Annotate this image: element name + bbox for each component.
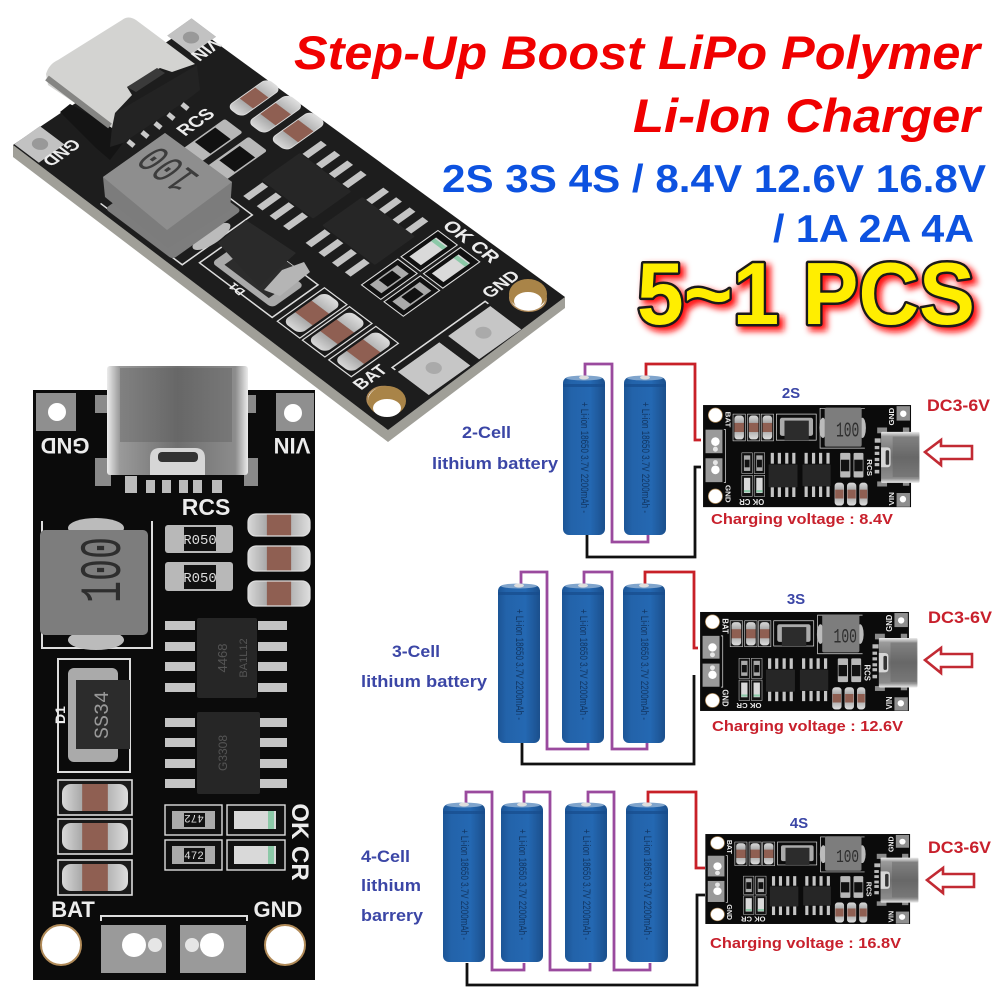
product photo: top view board: GND: [41, 433, 89, 458]
batteries 4S: + Li-ion 18650 3.7V 2200mAh -: [641, 829, 653, 940]
input voltage 2S: DC3-6V: [927, 397, 990, 415]
4-cell label: [361, 847, 424, 925]
batteries 4S: + Li-ion 18650 3.7V 2200mAh -: [516, 829, 528, 940]
title: [294, 26, 983, 142]
product photo: top view board: SS34: [92, 691, 115, 739]
product photo: angled charger board: VIN: [186, 35, 226, 64]
panel: 3-cell wiring: [361, 572, 992, 764]
batteries 4S: [443, 802, 668, 962]
charger board 4S: VIN: [886, 911, 895, 922]
wires 3S: [521, 572, 698, 764]
charger board 4S: OK CR: [740, 915, 766, 923]
charger board 2S: 100: [836, 420, 859, 444]
charger board 3S: GND: [720, 689, 729, 707]
charger board 2S: RCS: [865, 459, 874, 476]
batteries 2S: + Li-ion 18650 3.7V 2200mAh -: [639, 402, 651, 513]
quantity badge: 5~1 PCS: [637, 244, 975, 343]
charger board 2S: [703, 405, 919, 507]
charger board 3S: 100: [834, 627, 857, 649]
input voltage 3S: DC3-6V: [928, 609, 992, 627]
diode: [218, 220, 310, 296]
heading 4S: 4S: [790, 815, 808, 832]
arrow 2S: [925, 440, 972, 465]
wires 2S: [585, 364, 701, 557]
charger board 4S: GND: [886, 836, 895, 852]
inductor: [103, 133, 232, 248]
batteries 3S: + Li-ion 18650 3.7V 2200mAh -: [638, 609, 650, 720]
specification text: 2S 3S 4S / 8.4V 12.6V 16.8V: [442, 158, 986, 201]
charger board 2S: BAT: [723, 412, 732, 428]
panel: 4-cell wiring: [361, 792, 991, 985]
specification text: [442, 158, 986, 251]
charger board 3S: [700, 612, 917, 711]
product photo: angled charger board: RCS: [171, 104, 219, 139]
product photo: top view board: D1: [52, 706, 68, 724]
product photo: angled charger board: GND: [38, 136, 85, 170]
wires 4S: [466, 792, 705, 985]
3-cell label: lithium battery: [361, 672, 488, 691]
product photo: top view board: G3308: [216, 735, 230, 771]
inductor: 100: [128, 137, 212, 198]
arrow 4S: [927, 868, 974, 893]
mounting holes: [368, 279, 547, 417]
title: Li-Ion Charger: [633, 89, 983, 142]
batteries 4S: + Li-ion 18650 3.7V 2200mAh -: [458, 829, 470, 940]
product photo: top view board: R050: [183, 571, 217, 587]
charging voltage 4S: Charging voltage : 16.8V: [710, 936, 901, 952]
product photo: top view board: RCS: [182, 494, 230, 520]
arrow 3S: [925, 648, 972, 673]
product photo: top view board: 100: [73, 537, 138, 603]
batteries 2S: [563, 376, 666, 535]
product photo: top view board: [33, 366, 315, 980]
heading 2S: 2S: [782, 385, 800, 402]
batteries 2S: + Li-ion 18650 3.7V 2200mAh -: [578, 402, 590, 513]
product photo: top view board: BAT: [51, 897, 95, 922]
product photo: angled charger board: OK CR: [437, 217, 504, 267]
charging voltage 3S: Charging voltage : 12.6V: [712, 719, 903, 735]
product photo: top view board: 472: [184, 811, 204, 823]
2-cell label: lithium battery: [432, 454, 559, 473]
product photo: top view board: GND: [254, 897, 302, 922]
charger board 3S: OK CR: [736, 701, 761, 710]
charging voltage 2S: Charging voltage : 8.4V: [711, 512, 893, 528]
product photo: angled charger board: [13, 18, 565, 442]
title: Step-Up Boost LiPo Polymer: [294, 26, 983, 79]
charger board 2S: OK CR: [739, 497, 764, 506]
charger board 3S: VIN: [885, 696, 894, 709]
3-cell label: [361, 642, 488, 691]
product photo: top view board: R050: [183, 533, 217, 549]
product photo: top view board: 4468: [215, 644, 230, 672]
batteries 3S: [498, 584, 665, 743]
product photo: angled charger board: BAT: [348, 361, 392, 393]
3-cell label: 3-Cell: [392, 642, 440, 661]
product photo: top view board: 472: [184, 851, 204, 863]
charger board 2S: GND: [723, 485, 732, 503]
charger board 4S: GND: [725, 904, 734, 920]
batteries 4S: + Li-ion 18650 3.7V 2200mAh -: [580, 829, 592, 940]
charger board 2S: GND: [887, 407, 896, 425]
charger board 3S: BAT: [720, 618, 729, 634]
USB-C connector: [46, 18, 200, 160]
charger board 3S: RCS: [863, 665, 872, 681]
product photo: top view board: VIN: [274, 433, 310, 458]
2-cell label: 2-Cell: [462, 423, 511, 442]
4-cell label: 4-Cell: [361, 847, 410, 866]
2-cell label: [432, 423, 559, 473]
charger board 4S: [705, 834, 918, 924]
4-cell label: lithium: [361, 876, 421, 895]
product photo: angled charger board: GND: [477, 267, 524, 301]
charger board 4S: BAT: [725, 840, 734, 854]
input voltage 4S: DC3-6V: [928, 839, 991, 857]
charger board 4S: RCS: [865, 882, 874, 897]
4-cell label: barrery: [361, 906, 424, 925]
batteries 3S: + Li-ion 18650 3.7V 2200mAh -: [577, 609, 589, 720]
product photo: top view board: BA1L12: [238, 638, 250, 678]
product photo: top view board: OK CR: [286, 803, 313, 881]
charger board 2S: VIN: [887, 492, 896, 505]
batteries 3S: + Li-ion 18650 3.7V 2200mAh -: [513, 609, 525, 720]
charger board 3S: GND: [885, 614, 894, 632]
charger board 4S: 100: [836, 846, 859, 868]
specification text: / 1A 2A 4A: [773, 208, 974, 251]
quantity badge: 5~1 PCS: [641, 248, 979, 347]
heading 3S: 3S: [787, 591, 805, 608]
panel: 2-cell wiring: [432, 364, 990, 557]
product photo: angled charger board: D1: [225, 280, 249, 298]
